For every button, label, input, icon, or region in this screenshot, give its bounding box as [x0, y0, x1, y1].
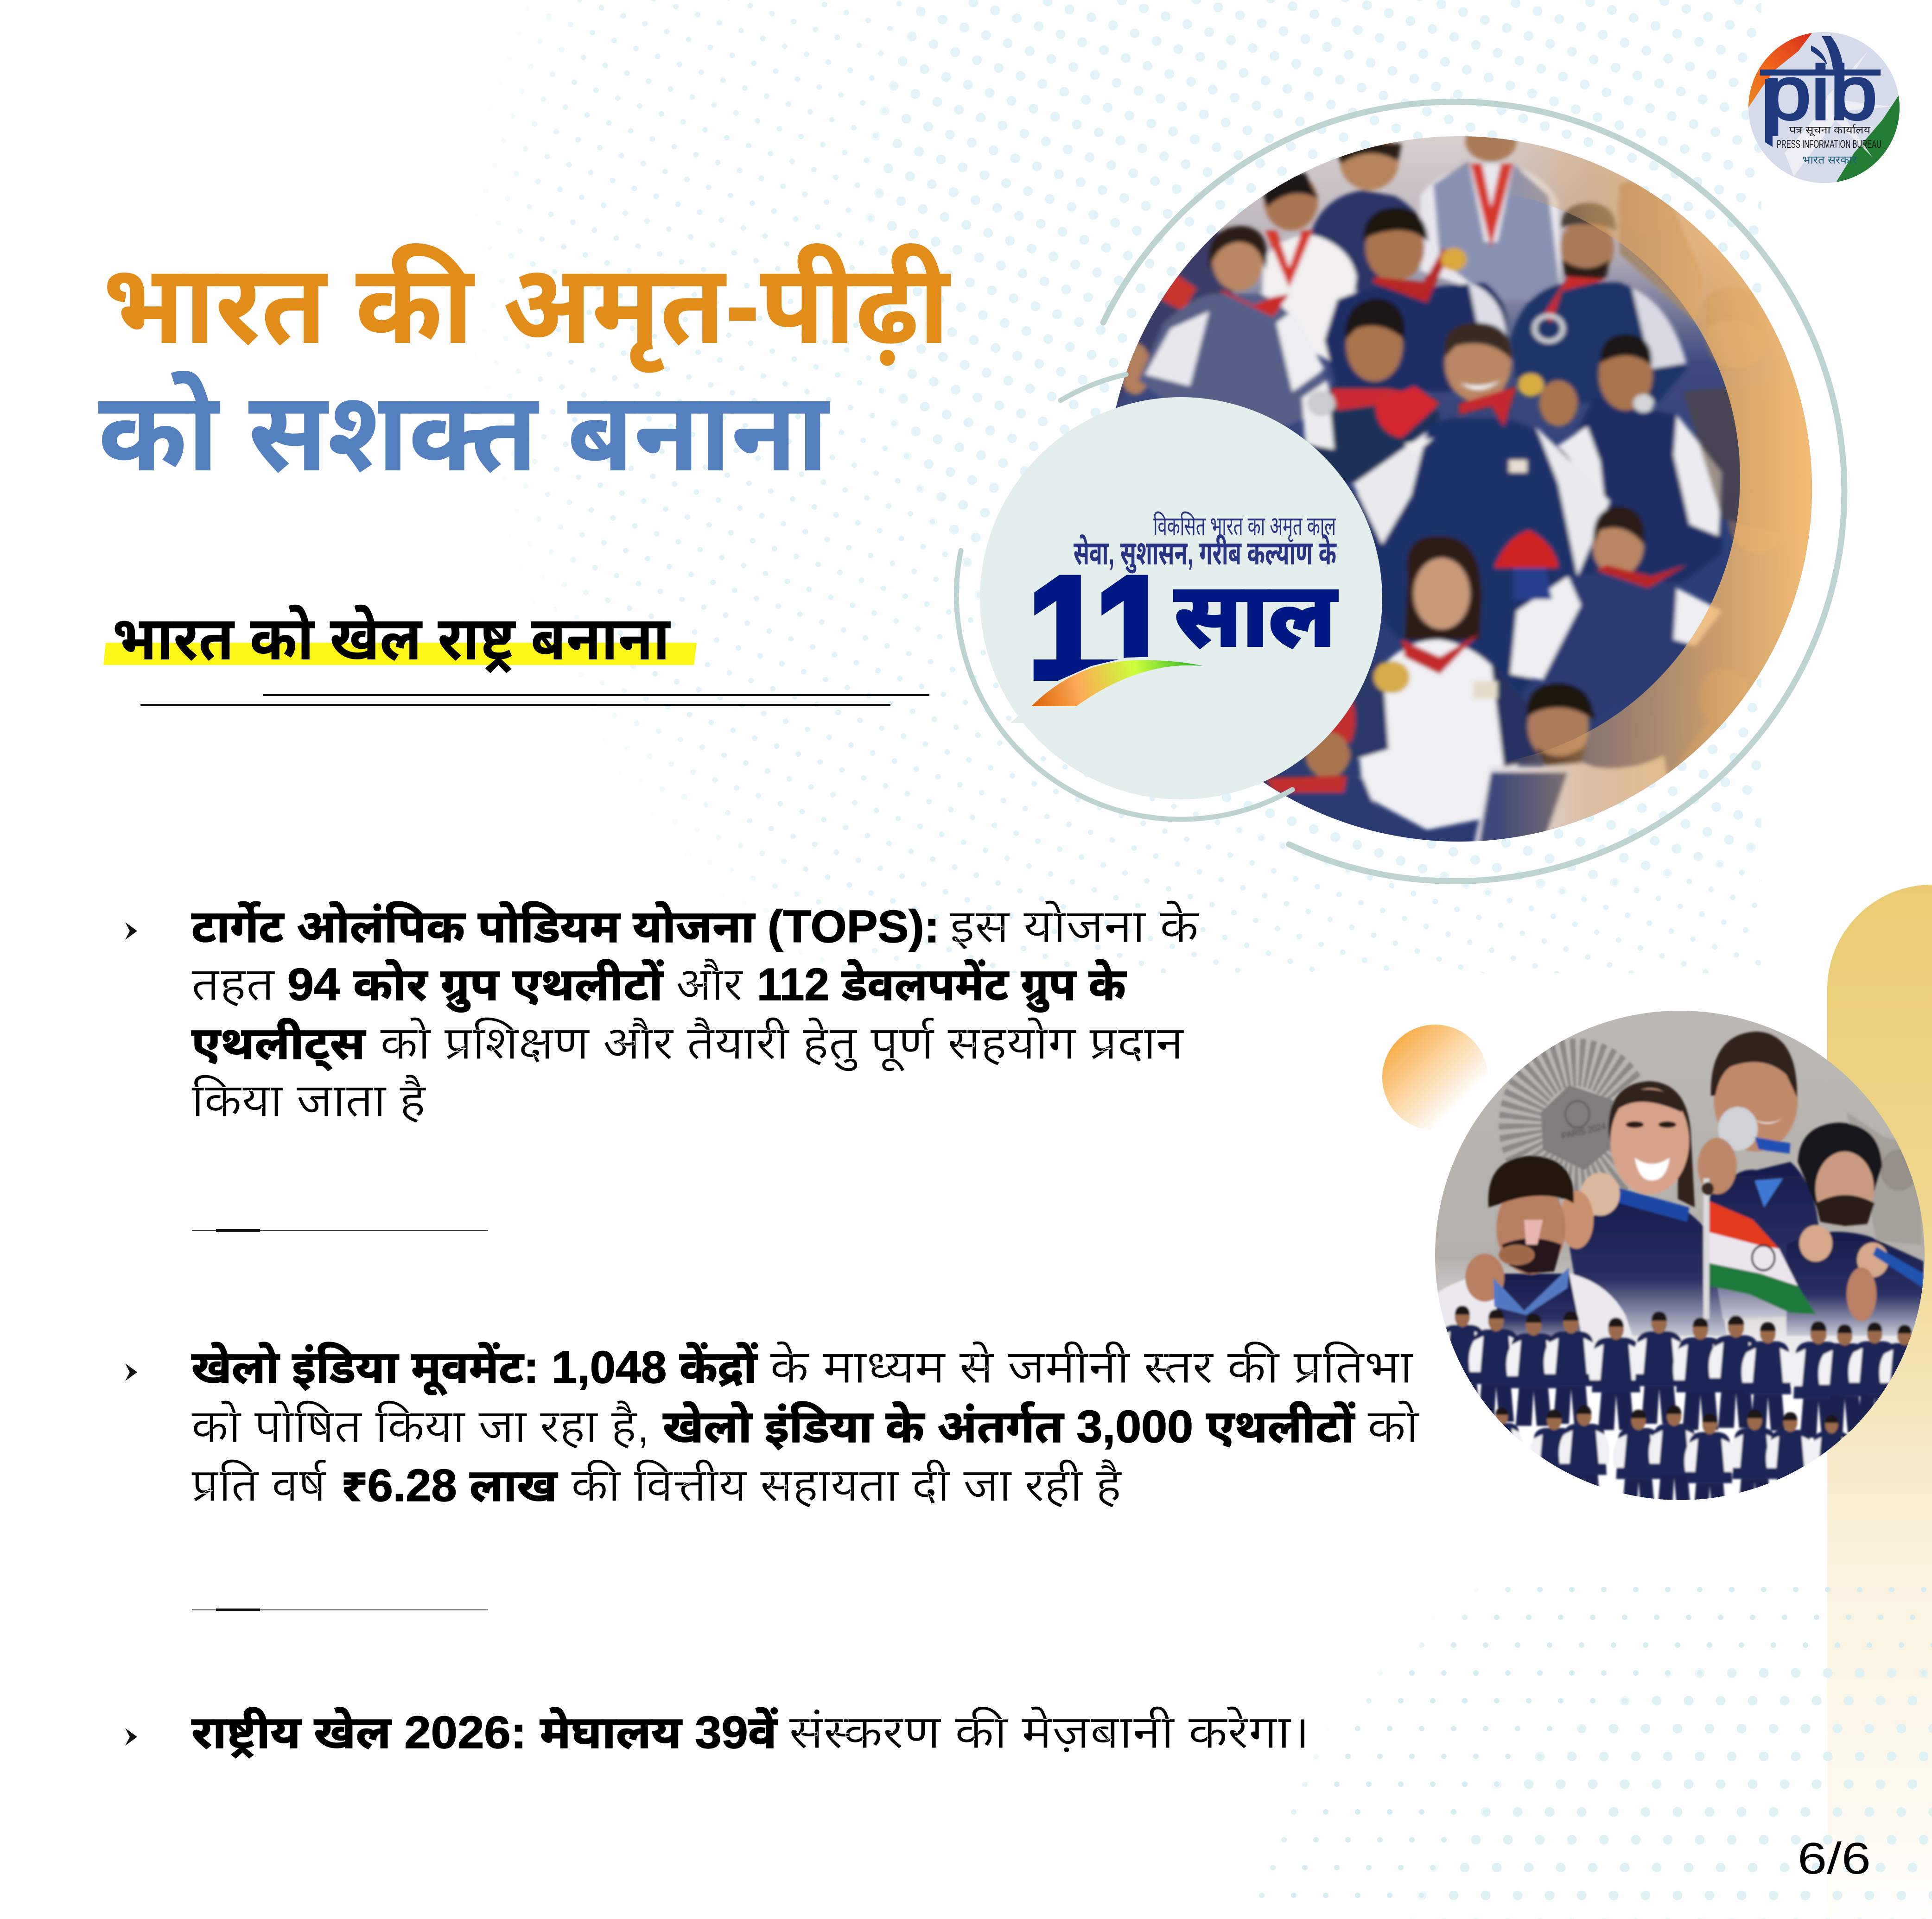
Indian flag	[1702, 1178, 1816, 1319]
team standing row	[1436, 1306, 1930, 1438]
list item 1: TOPS: किया जाता है	[191, 1075, 426, 1127]
list item 1: TOPS: 94 कोर ग्रुप एथलीटों	[287, 959, 664, 1013]
title: blue line: को सशक्त बनाना	[98, 370, 830, 494]
bullet chevron	[125, 1363, 137, 1381]
photo central athlete	[1350, 323, 1613, 749]
photo front row	[1260, 506, 1722, 853]
decorative orange quarter circle	[1382, 1025, 1488, 1130]
turbaned athlete	[1786, 1122, 1923, 1336]
logo: PIB	[1748, 32, 1900, 183]
list item 2: Khelo India: खेलो इंडिया मूवमेंट: 1,048 केंद्रों	[191, 1342, 758, 1396]
photo: athletes with medals	[1116, 136, 1812, 842]
photo warm tint overlay	[1066, 93, 1854, 904]
photo figures back row	[1110, 121, 1703, 415]
list item 1: TOPS: एथलीट्स	[191, 1018, 366, 1071]
photo figures middle row	[1138, 203, 1722, 588]
list item 1: TOPS: इस योजना के	[950, 900, 1200, 952]
medal graphic left	[1520, 1063, 1633, 1187]
divider 1	[192, 1229, 488, 1232]
list item 2: Khelo India: की वित्तीय सहायता दी जा रही है	[571, 1459, 1122, 1511]
list item 2: Khelo India: को	[1367, 1400, 1420, 1452]
ring: outer arc around photo	[1103, 101, 1844, 881]
list item 2: Khelo India: के माध्यम से जमीनी स्तर की प्रतिभा	[770, 1341, 1414, 1393]
heading underlines	[140, 694, 929, 706]
badge: 11 years logo: विकसित भारत का अमृत काल	[1153, 511, 1336, 542]
logo cut under numerals	[1010, 657, 1214, 723]
logo swoosh	[1031, 660, 1203, 706]
logo: PIB: भारत सरकार	[1802, 154, 1857, 166]
list item 1: TOPS: तहत	[191, 958, 275, 1010]
badge: 11 years logo: साल	[1175, 566, 1337, 665]
divider 2	[192, 1609, 488, 1611]
list item 3: National Games: राष्ट्रीय खेल 2026: मेघालय 39वें	[191, 1707, 778, 1758]
logo: PIB: pib	[1764, 51, 1877, 135]
logo strokes	[1765, 36, 1843, 147]
list item 1: TOPS: टार्गेट ओलंपिक पोडियम योजना (TOPS):	[191, 901, 940, 952]
badge: 11 years logo: 11	[1028, 547, 1170, 709]
title: orange line: भारत की अमृत-पीढ़ी	[102, 242, 951, 373]
background: halftone dots top	[490, 0, 1761, 973]
list item 2: Khelo India	[125, 1341, 1420, 1511]
panel: yellow side band	[1827, 885, 1932, 1919]
list item 1: TOPS: और	[676, 958, 744, 1010]
bullet chevron	[125, 922, 137, 940]
medal graphic left: PARIS 2024	[1561, 1121, 1607, 1141]
list item 2: Khelo India: को पोषित किया जा रहा है,	[191, 1400, 650, 1452]
photo orange tinted figures	[1645, 286, 1805, 807]
list item 2: Khelo India: ₹6.28 लाख	[341, 1460, 558, 1511]
background: halftone dots bottom	[1259, 1587, 1932, 1919]
list item 1: TOPS: 112 डेवलपमेंट ग्रुप के	[757, 959, 1127, 1013]
photo: Paris 2024 medalists	[1432, 1008, 1930, 1518]
female athlete	[1560, 1081, 1727, 1336]
bullet chevron	[125, 1728, 137, 1746]
medal graphic right	[1847, 1112, 1921, 1245]
list item 1: TOPS: को प्रशिक्षण और तैयारी हेतु पूर्ण सहयोग प्रदान	[380, 1017, 1184, 1072]
badge: 11 years logo	[980, 397, 1382, 799]
list item 2: Khelo India: खेलो इंडिया के अंतर्गत 3,000 एथलीटों	[663, 1401, 1355, 1452]
team seated row	[1481, 1406, 1854, 1518]
badge: 11 years logo: सेवा, सुशासन, गरीब कल्याण के	[1074, 534, 1337, 574]
list item 1: TOPS	[125, 900, 1200, 1127]
subheading with yellow highlight: भारत को खेल राष्ट्र बनाना	[112, 604, 671, 673]
list item 2: Khelo India: प्रति वर्ष	[191, 1459, 327, 1511]
ring: inner arcs around badge	[956, 374, 1292, 819]
male athlete top centre	[1698, 1032, 1831, 1319]
curly haired athlete	[1436, 1156, 1637, 1348]
list item 3: National Games: संस्करण की मेज़बानी करेगा।	[789, 1706, 1310, 1758]
page number: 6/6	[1798, 1834, 1871, 1883]
logo: PIB: पत्र सूचना कार्यालय	[1789, 124, 1871, 137]
list item 3: National Games	[125, 1706, 1310, 1758]
